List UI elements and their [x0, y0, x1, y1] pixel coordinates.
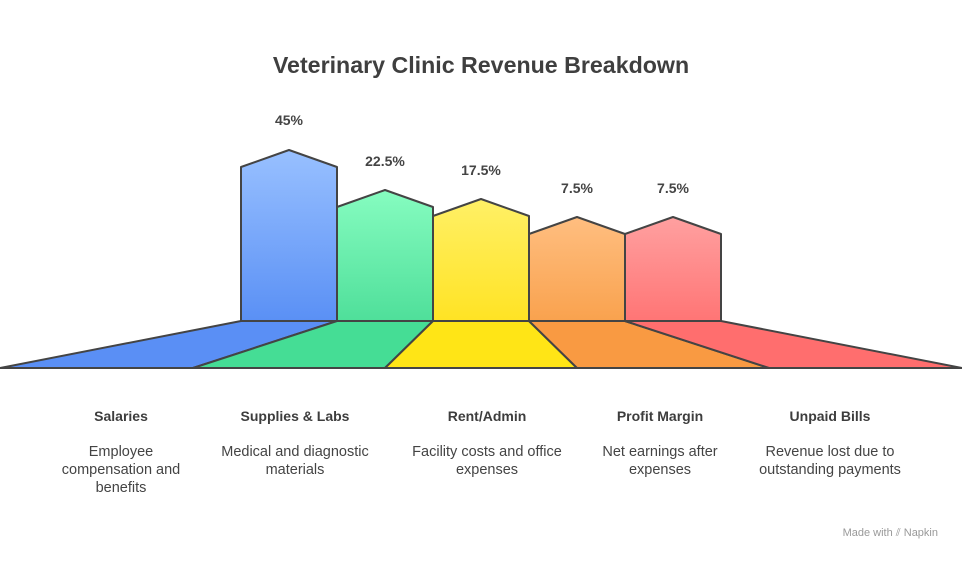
- label: profit: Profit Margin: [617, 408, 703, 424]
- label: salaries: Employee compensation and benefits: [62, 444, 180, 496]
- percentages: 7.5%: [561, 180, 594, 196]
- chart: [0, 112, 962, 369]
- bar: supplies: [193, 190, 433, 368]
- label: salaries: Salaries: [94, 408, 148, 424]
- label: unpaid: Unpaid Bills: [790, 408, 870, 424]
- percentages: 45%: [275, 112, 304, 128]
- label: rent: Rent/Admin: [448, 408, 526, 424]
- title: Veterinary Clinic Revenue Breakdown: [273, 52, 689, 78]
- label: profit: Net earnings after expenses: [602, 444, 718, 478]
- percentages: 7.5%: [657, 180, 690, 196]
- label: supplies: Medical and diagnostic materials: [221, 444, 369, 478]
- label: salaries: [62, 408, 180, 496]
- label: unpaid: [759, 408, 901, 478]
- bar: unpaid: [625, 217, 962, 368]
- bar: rent: [385, 199, 577, 368]
- percentages: 22.5%: [365, 153, 405, 169]
- label: supplies: Supplies & Labs: [241, 408, 349, 424]
- label: rent: [412, 408, 562, 478]
- percentages: [275, 112, 690, 196]
- footer: Made with ⫽ Napkin: [843, 527, 938, 539]
- label: supplies: [221, 408, 369, 478]
- label: unpaid: Revenue lost due to outstanding payments: [759, 444, 901, 478]
- bar: salaries: [0, 150, 337, 368]
- label: profit: [602, 408, 718, 478]
- percentages: 17.5%: [461, 162, 501, 178]
- bar: profit: [529, 217, 769, 368]
- label: rent: Facility costs and office expenses: [412, 444, 562, 478]
